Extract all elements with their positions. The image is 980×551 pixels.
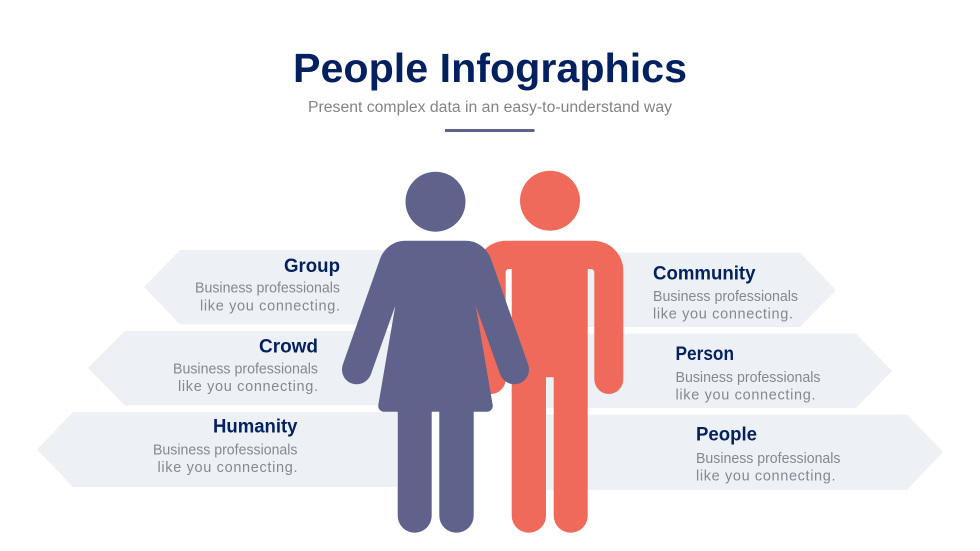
panel: People (530, 414, 943, 490)
panel: Person: Person (676, 343, 734, 365)
panel: Humanity (37, 412, 397, 487)
panel: Group: Business professionals (195, 281, 340, 297)
panel: People: like you connecting. (696, 468, 836, 484)
panel: Community: Business professionals (653, 289, 798, 305)
panel: Crowd (88, 331, 400, 406)
heading underline (445, 129, 534, 132)
panel: Group (144, 250, 400, 324)
panel: Humanity: Humanity (213, 416, 298, 438)
panel: Person (530, 334, 892, 408)
panel: Community: Community (653, 262, 756, 284)
panel: Crowd: Crowd (259, 336, 318, 358)
icon: woman figure (342, 172, 529, 533)
panel: Group: Group (284, 255, 340, 277)
panel: Community: like you connecting. (653, 306, 793, 322)
panel: Group: like you connecting. (200, 298, 340, 314)
panel: People: People (696, 424, 757, 446)
panel: People: Business professionals (696, 451, 840, 467)
icon: man figure (476, 171, 623, 533)
panel: Community (530, 252, 836, 327)
panel: Person: like you connecting. (676, 388, 816, 404)
panel: Humanity: Business professionals (153, 442, 298, 458)
subtitle: Present complex data in an easy-to-understand way (308, 99, 672, 116)
panel: Crowd: Business professionals (173, 362, 318, 378)
title: People Infographics (293, 45, 687, 91)
panel: Humanity: like you connecting. (158, 460, 298, 476)
panel: Person: Business professionals (676, 370, 820, 386)
panel: Crowd: like you connecting. (178, 379, 318, 395)
